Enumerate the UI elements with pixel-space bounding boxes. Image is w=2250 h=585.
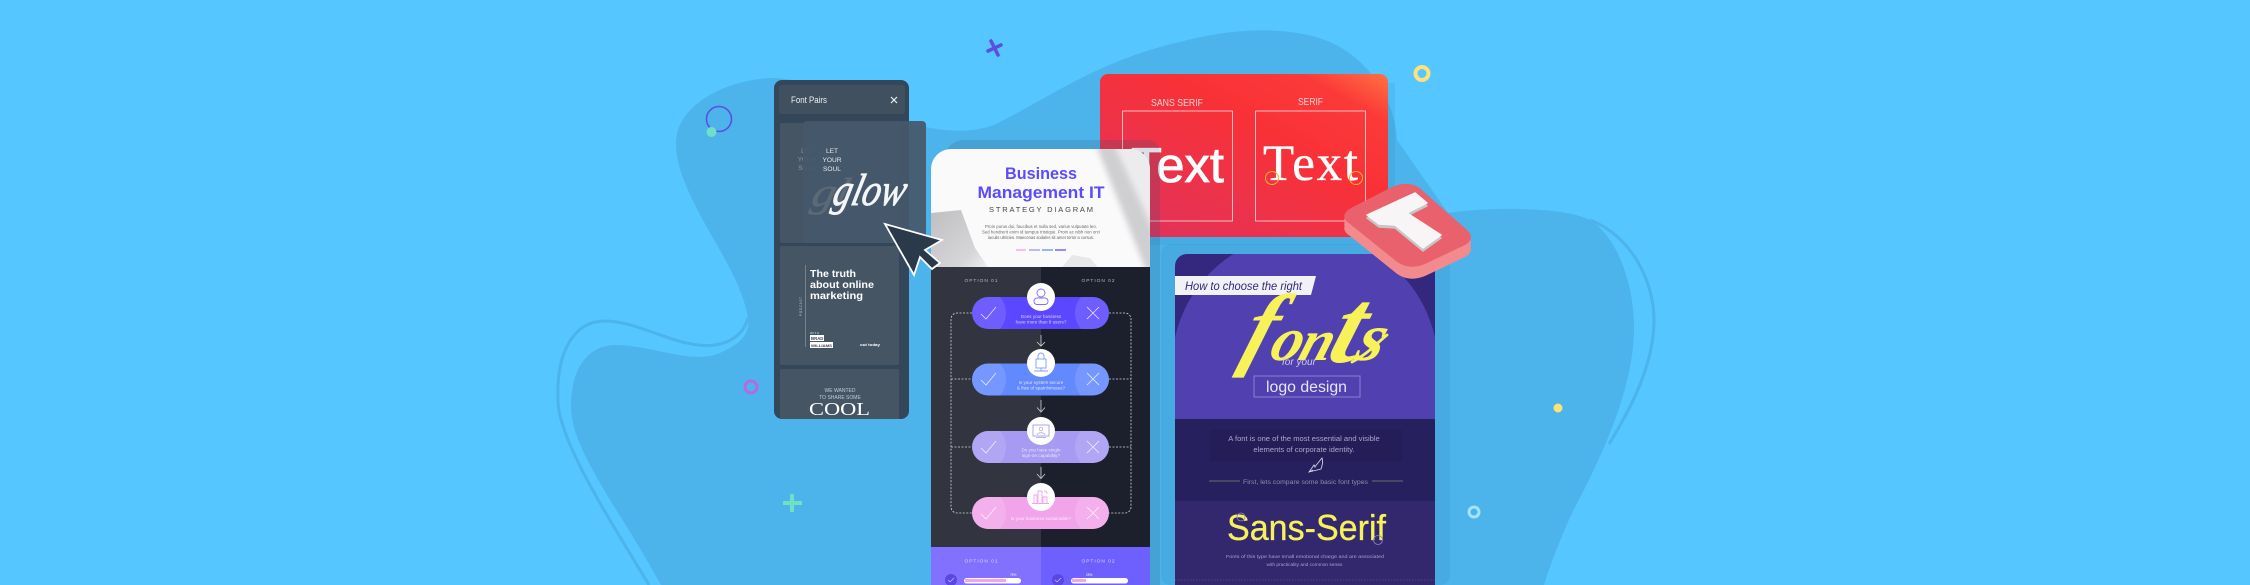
icon: cursor arrow — [885, 224, 942, 275]
banner scene — [556, 30, 1656, 585]
card: the truth about online marketing: about online — [810, 280, 874, 291]
hand arrow — [1309, 458, 1323, 472]
ghost text: SOUL — [798, 165, 816, 172]
serif box — [1256, 111, 1366, 221]
sidebar header — [779, 85, 905, 114]
dragged card: YOUR — [822, 157, 842, 164]
colour dashes — [1016, 249, 1066, 251]
intro band — [1175, 419, 1435, 501]
sans-serif heading: Sans-Serif — [1227, 507, 1387, 548]
sans-serif description: Fonts of this type have small emotional charge and are associated — [1226, 554, 1384, 560]
dragged card: glow — [829, 165, 913, 215]
label: serif: SERIF — [1298, 97, 1323, 108]
description — [982, 224, 1100, 240]
intro text: elements of corporate identity. — [1253, 445, 1355, 454]
intro text — [1228, 436, 1380, 454]
card: cool: TO SHARE SOME — [819, 395, 861, 401]
fonts script word: n — [1292, 308, 1345, 373]
card: the truth about online marketing: WILLIAMS — [811, 343, 832, 348]
panel: font pairs sidebar — [774, 80, 926, 421]
pill: step 3: Do you have single — [1021, 448, 1061, 452]
card: the truth about online marketing — [780, 246, 899, 365]
fonts script word: t — [1317, 267, 1388, 385]
logo design: logo design — [1266, 379, 1347, 396]
decoration: purple cross — [988, 41, 1001, 55]
dragged card: SOUL — [823, 166, 841, 173]
background blob — [558, 30, 1654, 585]
description: iaculis ultricies. Maecenas sodales sit amet tortor a cursus. — [988, 235, 1094, 240]
intro box — [1210, 430, 1402, 461]
decoration: light ring — [1469, 507, 1479, 517]
arch — [1175, 254, 1435, 419]
results background — [931, 547, 1150, 585]
ghost text: YOUR — [798, 156, 817, 164]
icon: screen — [1027, 417, 1055, 445]
card: the truth about online marketing: out today — [860, 343, 881, 347]
sidebar title: Font Pairs — [791, 95, 827, 105]
card: cool: WE WANTED — [825, 388, 856, 394]
ghost text — [798, 148, 803, 170]
sans box — [1122, 111, 1232, 221]
close icon — [891, 97, 897, 103]
pill: step 3 — [972, 431, 1109, 463]
comparison caption: First, lets compare some basic font types — [1243, 479, 1369, 486]
panel: business management strategy diagram — [931, 145, 1154, 585]
ribbon text: How to choose the right — [1185, 279, 1303, 293]
pill: step 2: & free of spam/viruses? — [1017, 386, 1066, 390]
card: cool — [780, 369, 899, 421]
card: the truth about online marketing: marketing — [810, 291, 863, 302]
logo design box — [1254, 376, 1360, 397]
pill: step 2: Is your system secure — [1019, 380, 1064, 385]
decoration: blue ring with green dot — [706, 106, 732, 137]
sans-serif description: with practicality and common sense. — [1266, 562, 1344, 568]
title: Business — [1005, 164, 1077, 183]
panel: purple card shadow — [1161, 244, 1450, 585]
fonts script word: f — [1231, 277, 1303, 378]
dragged card: LET — [826, 148, 838, 155]
dashed flow lines — [951, 313, 1131, 513]
option headers: OPTION 02 — [1082, 278, 1115, 284]
title: Management IT — [978, 183, 1105, 202]
description: Proin purus dui, faucibus et nulla sed, varius vulputate leo. — [985, 224, 1097, 229]
label: sans serif: SANS SERIF — [1151, 98, 1203, 109]
pill: step 1: Does your business — [1021, 314, 1062, 319]
serif sample text: Text — [1263, 136, 1358, 192]
icon: lock — [1027, 349, 1055, 377]
panel: red text comparison card — [1100, 74, 1395, 245]
header background — [931, 149, 1150, 267]
results headers: OPTION 02 — [1082, 558, 1115, 564]
decoration: yellow ring — [1416, 67, 1428, 80]
icon: city — [1027, 483, 1055, 511]
result: option 2: 25% — [1086, 573, 1093, 577]
pill: step 1 — [972, 297, 1109, 329]
panel: fonts for logo design card — [1172, 233, 1438, 585]
pill: step 4 — [972, 497, 1109, 529]
serif highlight circles — [1266, 172, 1362, 184]
diagram background — [931, 267, 1150, 547]
for your: for your — [1282, 357, 1317, 368]
card: cool: COOL — [809, 399, 870, 419]
card: the truth about online marketing: The truth — [810, 269, 856, 280]
pill: step 3: sign-on capability? — [1022, 453, 1060, 458]
icon: 3D T badge — [1344, 184, 1471, 279]
result: option 1 — [945, 573, 1021, 585]
decoration: yellow dot — [1554, 404, 1562, 412]
result: option 2 — [1052, 573, 1128, 585]
icon: person — [1027, 283, 1055, 311]
sans-serif anchors — [1237, 513, 1382, 544]
ribbon — [1175, 276, 1316, 295]
card: let your soul base — [780, 123, 806, 243]
option headers: OPTION 01 — [964, 278, 998, 284]
card: the truth about online marketing: PODCAST — [799, 296, 803, 316]
decoration: green plus — [783, 494, 802, 512]
card: the truth about online marketing: WITH — [810, 331, 820, 335]
fonts script word: o — [1263, 304, 1316, 374]
sans-serif band — [1175, 501, 1435, 585]
panel: business card shadow — [944, 140, 1160, 585]
pill: step 1: have more than 8 users? — [1016, 320, 1067, 324]
sans-serif description — [1226, 554, 1384, 567]
decoration: magenta ring — [745, 381, 757, 393]
result: option 1: 75% — [1010, 573, 1017, 577]
ghost text: LET — [801, 148, 813, 155]
results headers: OPTION 01 — [964, 558, 998, 564]
card: the truth about online marketing: BRAD — [811, 336, 823, 341]
title — [978, 167, 1104, 202]
option headers — [964, 279, 1114, 282]
pill: step 2 — [972, 364, 1109, 396]
pill: step 4: Is your business sustainable? — [1011, 516, 1072, 521]
header photo — [931, 145, 1154, 270]
sans sample text: Text — [1131, 139, 1224, 193]
dragged card: gl — [808, 171, 855, 216]
description: Sed hendrerit enim id tempus tristique. Proin ac nibh non orci — [982, 230, 1100, 234]
fonts script word: s — [1347, 301, 1399, 376]
subtitle: STRATEGY DIAGRAM — [989, 205, 1093, 214]
results headers — [964, 558, 1115, 564]
fonts script word — [1232, 293, 1388, 378]
intro text: A font is one of the most essential and visible — [1228, 434, 1380, 443]
flow arrows — [1037, 335, 1045, 478]
dragged card — [803, 121, 926, 243]
